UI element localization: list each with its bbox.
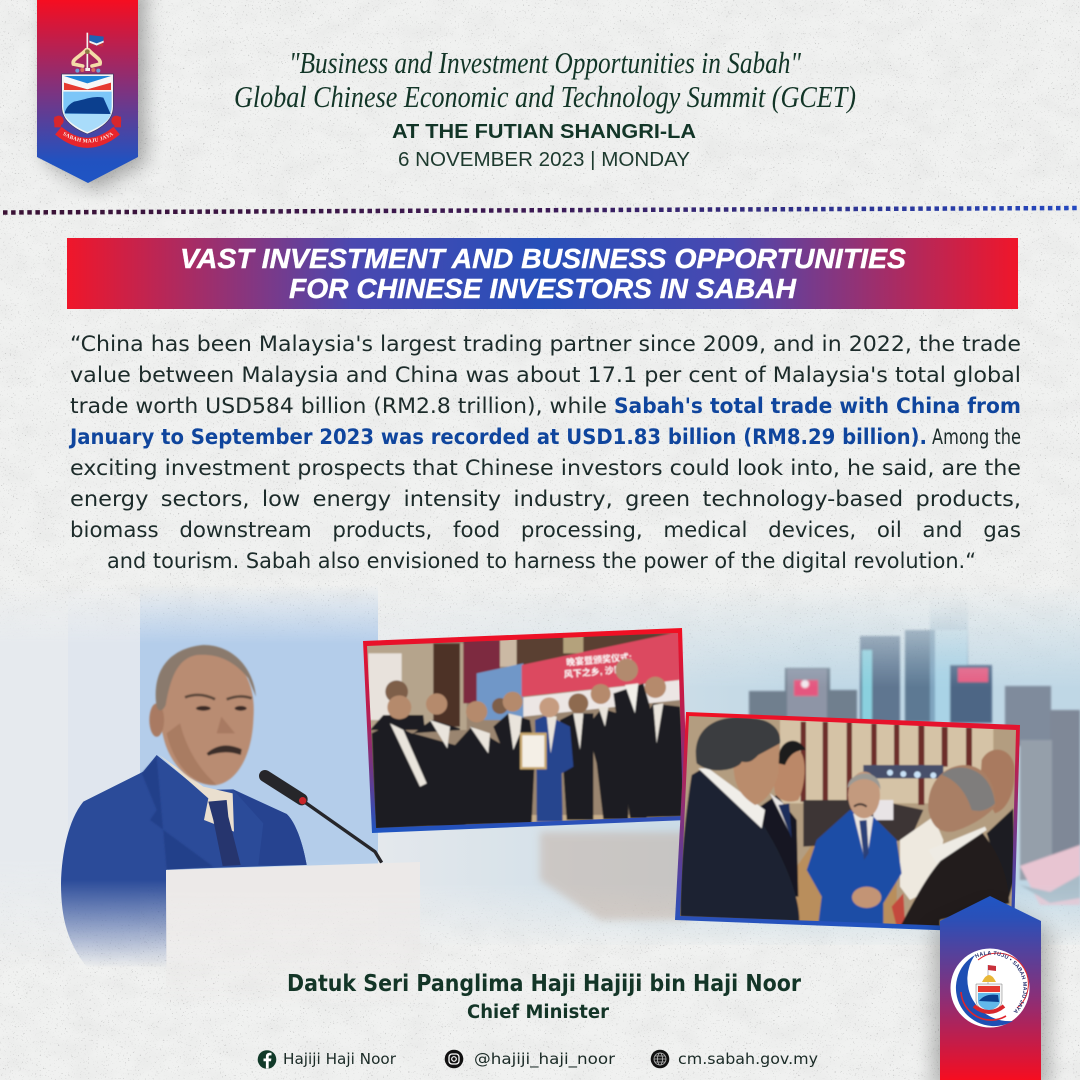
back row people [370, 659, 650, 820]
speaker portrait [61, 645, 382, 967]
event title: "Business and Investment Opportunities in Sabah" [289, 45, 802, 80]
quote paragraph: exciting investment prospects that Chinese investors could look into, he said, are the [70, 456, 1021, 481]
icon: Sabah crest [54, 33, 121, 143]
certificate [520, 733, 547, 769]
summit title: Global Chinese Economic and Technology Summit (GCET) [234, 79, 856, 114]
headline banner [67, 238, 1018, 309]
bottom-right banner shadow [932, 905, 1050, 1080]
quote paragraph: Among the [932, 425, 1021, 450]
shirt [159, 755, 234, 832]
icon: instagram [445, 1050, 463, 1068]
icon: facebook [258, 1050, 276, 1069]
skyline [749, 590, 1080, 905]
city sky [378, 585, 1080, 945]
faded temple image [540, 832, 690, 920]
quote paragraph: trade worth USD584 billion (RM2.8 trillion), while [70, 394, 607, 419]
far right man [980, 750, 1015, 900]
quote paragraph: Sabah's total trade with China from [614, 394, 1021, 419]
header text [234, 45, 856, 171]
minister title: Chief Minister [467, 1002, 610, 1023]
icon: website globe [651, 1050, 669, 1068]
quote paragraph: value between Malaysia and China was about 17.1 per cent of Malaysia's total global [70, 363, 1021, 388]
social footer [258, 1050, 818, 1069]
banner caption: 风下之乡, 沙巴 [563, 663, 623, 680]
banner caption [562, 651, 633, 680]
background photo: event hall [0, 593, 378, 942]
instagram handle: @hajiji_haji_noor [474, 1050, 616, 1069]
headline banner: FOR CHINESE INVESTORS IN SABAH [289, 273, 797, 304]
bottom-right banner with badge [940, 896, 1041, 1080]
guest of honour in blue [535, 715, 573, 822]
head [149, 645, 256, 785]
minister name: Datuk Seri Panglima Haji Hajiji bin Haji Noor [287, 971, 802, 997]
quote paragraph: “China has been Malaysia's largest trading partner since 2009, and in 2022, the trade [70, 332, 1021, 357]
suit [61, 755, 307, 967]
quote paragraph: and tourism. Sabah also envisioned to harness the power of the digital revolution.“ [107, 549, 976, 574]
faces [387, 677, 666, 722]
left man navy suit [680, 717, 799, 922]
quote paragraph: energy sectors, low energy intensity industry, green technology-based products, [70, 487, 1021, 512]
quote paragraph: January to September 2023 was recorded at USD1.83 billion (RM8.29 billion). [68, 425, 927, 450]
blue suit man [807, 772, 902, 925]
right man in black [900, 765, 1009, 930]
facebook name: Hajiji Haji Noor [283, 1050, 397, 1068]
top-left banner with crest [37, 0, 138, 183]
microphone [265, 776, 382, 863]
website: cm.sabah.gov.my [678, 1050, 818, 1068]
crest ribbon motto: SABAH MAJU JAYA [63, 132, 114, 143]
banner caption: 晚宴暨颁奖仪式: [566, 651, 632, 668]
podium [166, 862, 420, 983]
second man [760, 741, 806, 897]
venue: AT THE FUTIAN SHANGRI-LA [392, 121, 696, 143]
icon: Hala Tuju badge: HALA TUJU • SABAH MAJU JAYA [974, 951, 1028, 1013]
headline banner: VAST INVESTMENT AND BUSINESS OPPORTUNITIES [180, 243, 906, 274]
white shirt guest [900, 817, 943, 900]
icon: Hala Tuju badge [950, 948, 1030, 1028]
quote paragraph [68, 332, 1021, 574]
shirts and ties [390, 703, 663, 787]
photo 1: group with certificate [360, 627, 690, 833]
front row suits [372, 703, 684, 829]
quote paragraph: biomass downstream products, food processing, medical devices, oil and gas [70, 518, 1021, 543]
top-left banner shadow [45, 0, 146, 190]
tie [208, 800, 241, 866]
photo 2: chief minister with guests [670, 710, 1023, 933]
date: 6 NOVEMBER 2023 | MONDAY [398, 149, 690, 171]
